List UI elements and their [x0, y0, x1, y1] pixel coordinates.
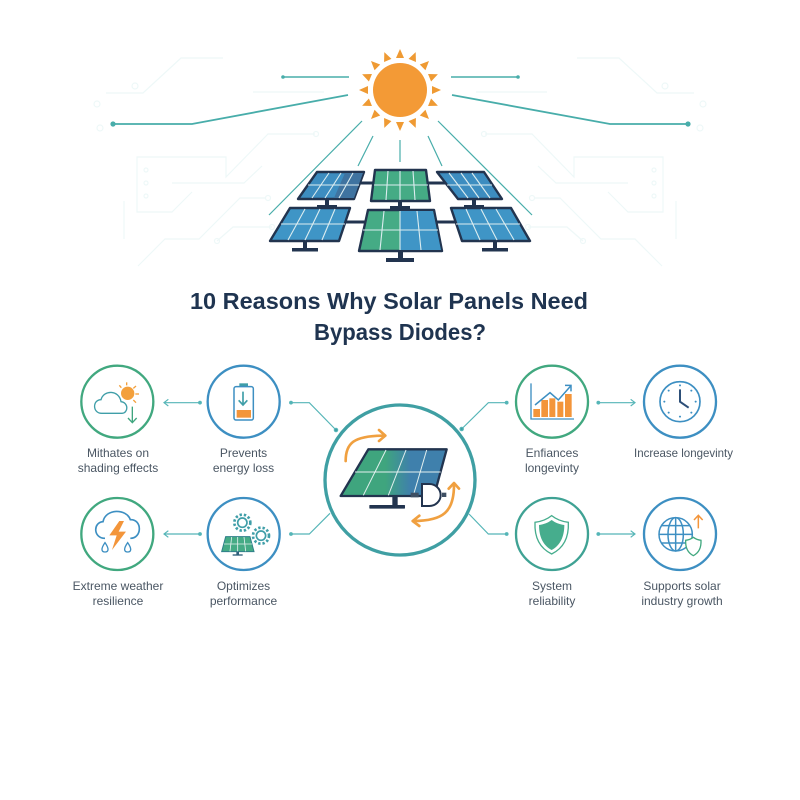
item: mitigates shading — [78, 366, 158, 475]
item: enhances longevity: longevinty — [525, 461, 579, 475]
item: supports solar industry growth: Supports solar — [643, 579, 721, 593]
item: extreme weather resilience: Extreme weather — [73, 579, 163, 593]
item: mitigates shading: shading effects — [78, 461, 158, 475]
right connectors — [460, 399, 635, 537]
item: system reliability: System — [532, 579, 572, 593]
item: supports solar industry growth — [641, 498, 723, 608]
item: optimizes performance: Optimizes — [217, 579, 270, 593]
background circuit pattern — [94, 58, 706, 266]
item: system reliability — [516, 498, 588, 608]
item: extreme weather resilience: resilience — [93, 594, 144, 608]
title: Bypass Diodes? — [314, 319, 486, 345]
item: system reliability: reliability — [529, 594, 575, 608]
item: increase longevity: Increase longevinty — [634, 446, 733, 460]
item: mitigates shading: Mithates on — [87, 446, 149, 460]
item: prevents energy loss: energy loss — [213, 461, 274, 475]
item: extreme weather resilience — [73, 498, 163, 608]
item: enhances longevity: Enfiances — [526, 446, 578, 460]
left connectors — [164, 399, 338, 537]
item: prevents energy loss: Prevents — [220, 446, 267, 460]
solar panel array — [270, 170, 530, 262]
title: 10 Reasons Why Solar Panels Need — [190, 288, 588, 314]
item: enhances longevity — [516, 366, 588, 475]
central diode panel hub — [325, 405, 475, 555]
item: supports solar industry growth: industry growth — [641, 594, 723, 608]
item: prevents energy loss — [208, 366, 280, 475]
icon: sun — [342, 32, 458, 148]
item: optimizes performance — [208, 498, 280, 608]
title — [190, 288, 588, 345]
item: optimizes performance: performance — [210, 594, 278, 608]
sun ray lines — [110, 75, 691, 215]
item: increase longevity — [634, 366, 733, 460]
